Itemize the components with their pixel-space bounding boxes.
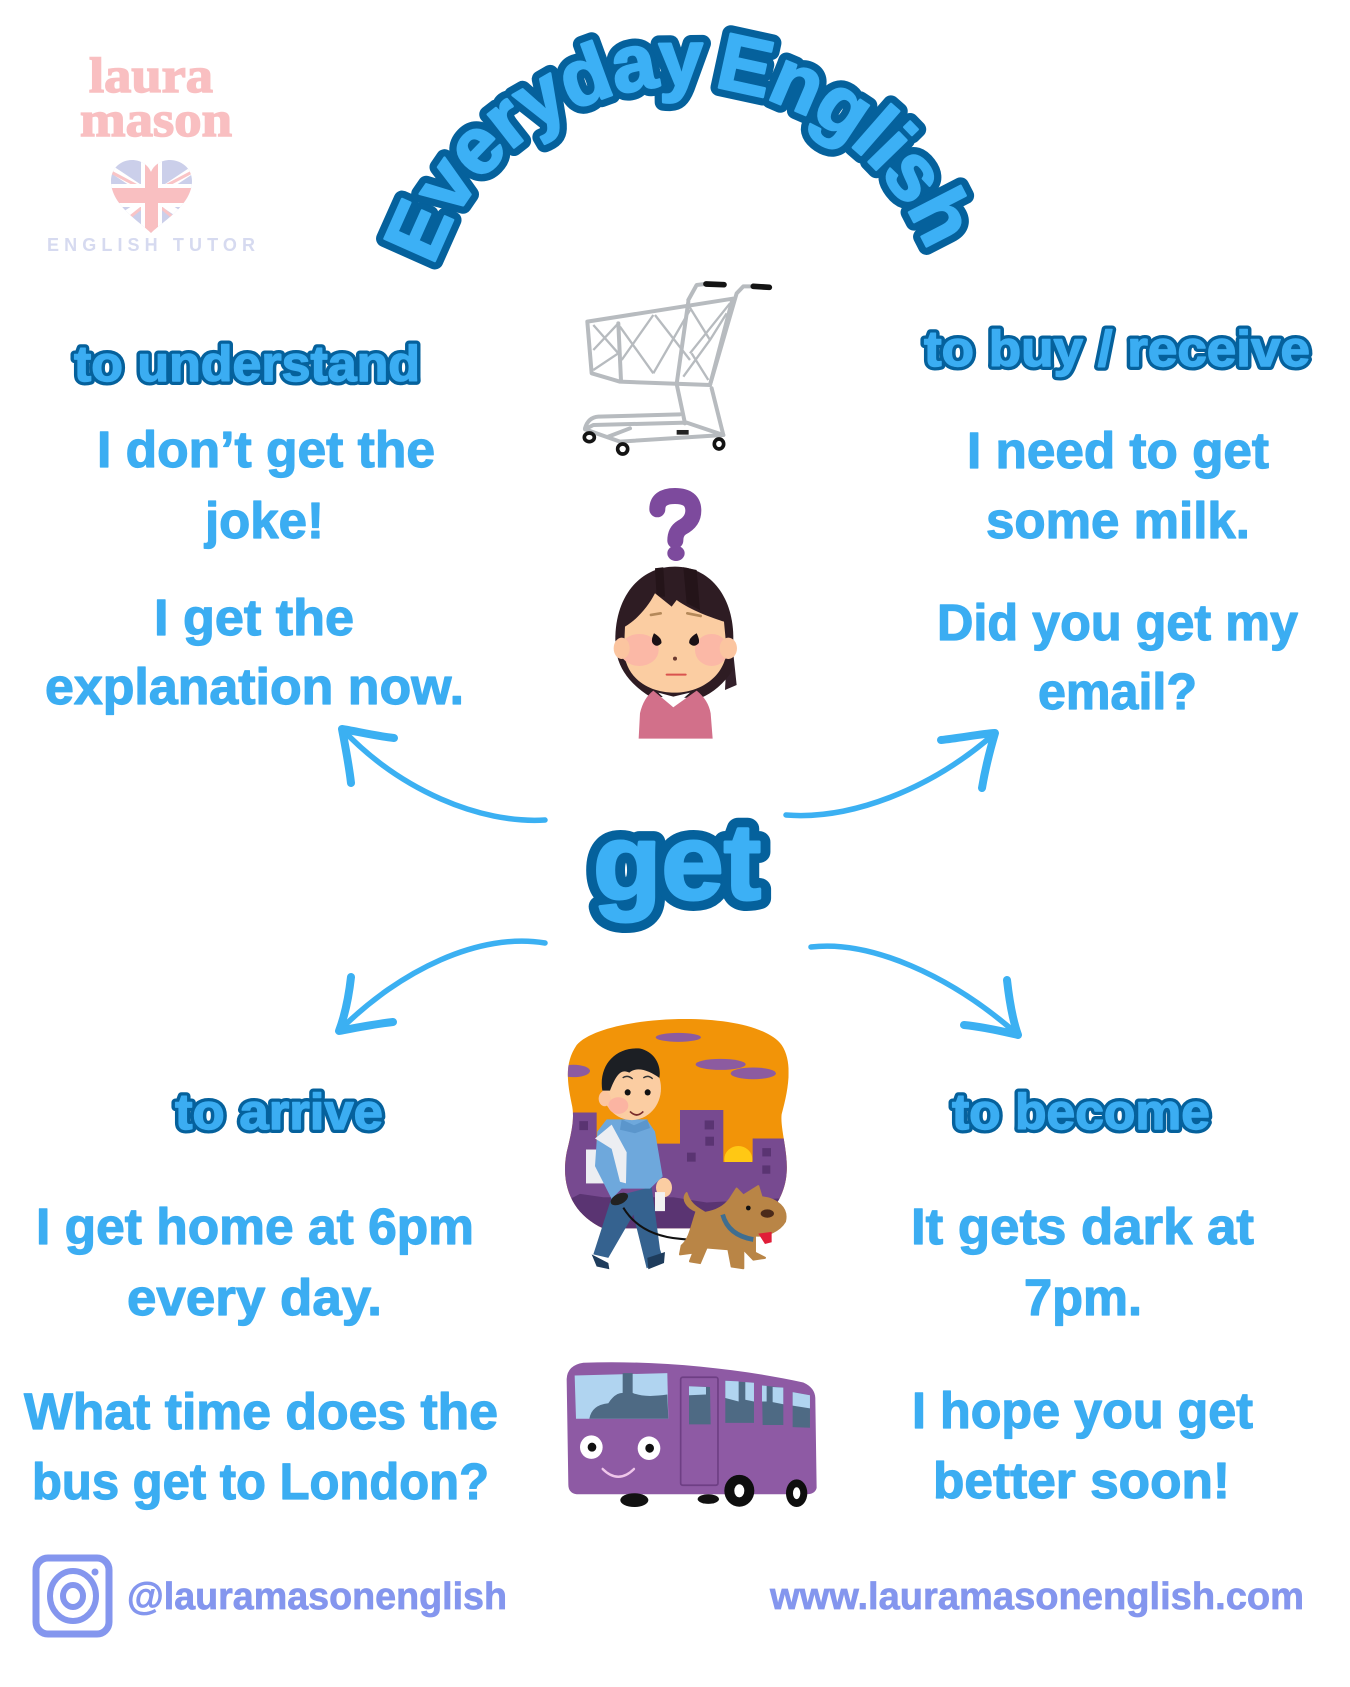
logo name: laura: [89, 47, 213, 103]
logo name: mason: [80, 91, 232, 147]
example: I hope you get better soon: [912, 1382, 1253, 1509]
heading: to become: to become: [952, 1084, 1210, 1140]
icon: confused girl with question mark: [614, 496, 737, 739]
title: Everyday English: [376, 25, 974, 270]
dog: [623, 1208, 727, 1240]
heading: to arrive: to arrive: [175, 1084, 383, 1140]
example: Did you get my email: [937, 594, 1299, 720]
icon: question mark: [657, 496, 693, 561]
heading: to understand: to understand: [74, 336, 420, 392]
example: I need to get some milk: [967, 422, 1269, 549]
icon: instagram: [36, 1558, 109, 1634]
icon: union jack heart: [111, 160, 192, 233]
example: I get the explanation now: [45, 589, 464, 715]
example: I don't get the joke: joke!: [204, 492, 324, 549]
example: Did you get my email: email?: [1038, 663, 1197, 720]
central word: get: get: [593, 801, 761, 922]
arrow: up right: [786, 733, 995, 816]
example: Did you get my email: Did you get my: [937, 594, 1299, 651]
example: I get home at 6pm every day: I get home at 6pm: [36, 1198, 474, 1255]
website: www.lauramasonenglish.com: [769, 1576, 1304, 1618]
heading: to buy / receive: to buy / receive: [924, 321, 1310, 377]
example: I hope you get better soon: better soon!: [933, 1452, 1230, 1509]
example: I need to get some milk: I need to get: [967, 422, 1269, 479]
arrow: down right: [811, 946, 1018, 1035]
example: I hope you get better soon: I hope you get: [912, 1382, 1253, 1439]
example: It gets dark at 7pm: [911, 1198, 1254, 1326]
example: I get home at 6pm every day: [36, 1198, 474, 1326]
example: I don't get the joke: I don’t get the: [97, 421, 435, 478]
central word: get: get: [593, 801, 761, 922]
example: I get home at 6pm every day: every day.: [127, 1269, 382, 1326]
example: What time does the bus get to London: What time does the: [24, 1383, 498, 1440]
icon: shopping cart: [584, 284, 769, 454]
logo name: [80, 47, 232, 147]
example: I get the explanation now: I get the: [154, 589, 354, 646]
sunset city background: [565, 1019, 789, 1228]
example: It gets dark at 7pm: 7pm.: [1024, 1269, 1142, 1326]
arrow: up left: [342, 729, 545, 820]
heading: to become: to become: [952, 1084, 1210, 1140]
icon: man walking dog at sunset: [565, 1019, 789, 1270]
example: What time does the bus get to London: bus get to London?: [32, 1453, 489, 1510]
example: I get the explanation now: explanation now.: [45, 658, 464, 715]
example: What time does the bus get to London: [24, 1383, 498, 1510]
heading: to understand: to understand: [74, 336, 420, 392]
logo tagline: ENGLISH TUTOR: [47, 235, 255, 255]
man: [593, 1187, 664, 1268]
logo: laura mason English tutor: [47, 47, 255, 255]
title: Everyday English: [383, 32, 967, 262]
icon: purple bus: [567, 1362, 817, 1507]
arrow: down left: [339, 941, 545, 1031]
instagram handle: @lauramasonenglish: [127, 1576, 507, 1618]
example: It gets dark at 7pm: It gets dark at: [911, 1198, 1254, 1255]
heading: to buy / receive: to buy / receive: [924, 321, 1310, 377]
heading: to arrive: to arrive: [175, 1084, 383, 1140]
example: I need to get some milk: some milk.: [986, 492, 1250, 549]
example: I don't get the joke: [97, 421, 435, 549]
